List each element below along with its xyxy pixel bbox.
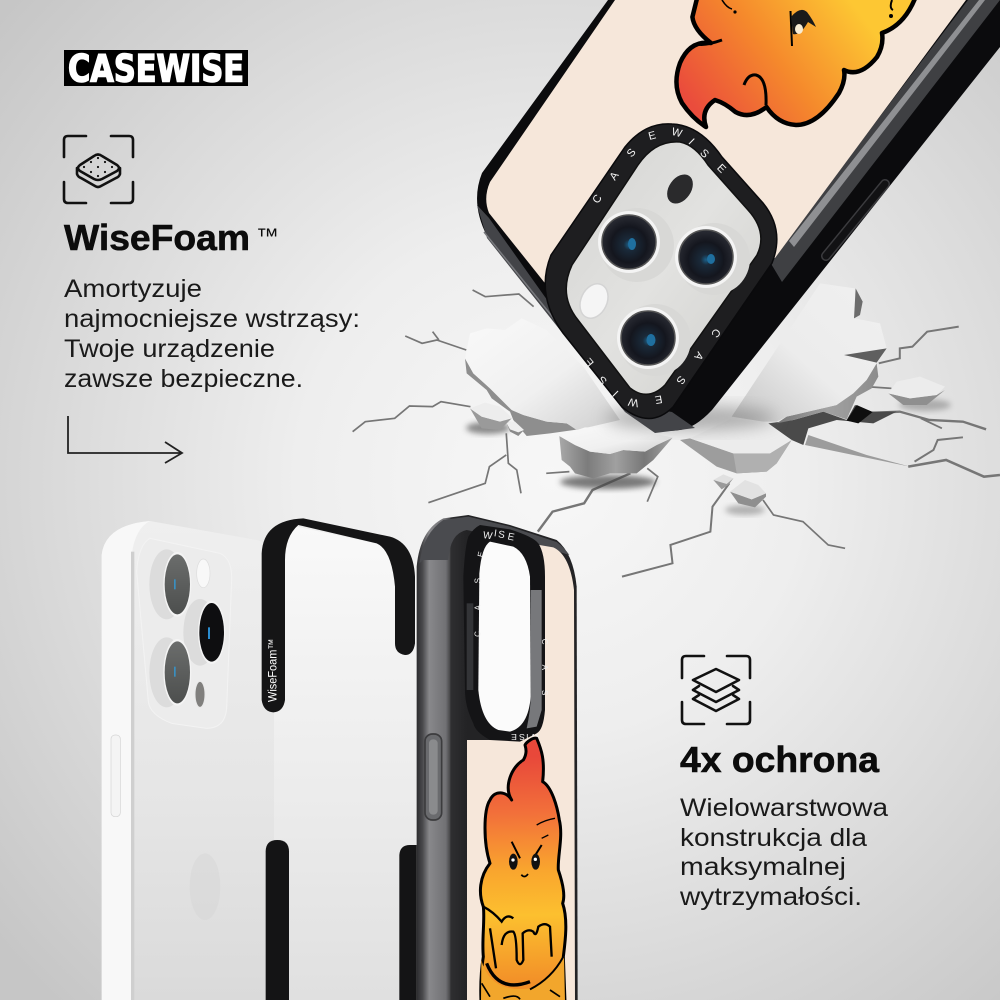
ring letters: A bbox=[474, 604, 483, 610]
text: protection description: maksymalnej bbox=[680, 853, 846, 881]
ring letters: W bbox=[482, 530, 494, 542]
text: protection description bbox=[679, 794, 888, 911]
plate: upper right bbox=[732, 283, 887, 423]
WiseFoam black strip bbox=[262, 518, 415, 712]
crack: wedge bbox=[805, 435, 910, 467]
heading: 4x ochrona: 4x ochrona bbox=[680, 739, 880, 780]
ring letters: A bbox=[540, 665, 549, 671]
impact shadows bbox=[466, 399, 951, 515]
text: protection description: wytrzymałości. bbox=[679, 883, 862, 911]
flash bbox=[197, 559, 210, 588]
sensor bbox=[195, 681, 205, 707]
text: WiseFoam description: Twoje urządzenie bbox=[64, 335, 275, 363]
white phone bbox=[102, 521, 277, 1000]
side button bbox=[826, 184, 885, 256]
flame folds bbox=[537, 818, 555, 838]
ring letters: E bbox=[476, 551, 486, 558]
ring letters: E bbox=[511, 732, 517, 742]
ring letters: S bbox=[519, 732, 525, 742]
text: WiseFoam description: najmocniejsze wstrząsy: bbox=[64, 305, 360, 333]
strip label: WiseFoam™ bbox=[265, 639, 279, 702]
camera ring bbox=[545, 124, 777, 418]
bottom flame illustration bbox=[480, 738, 566, 1000]
case phone bbox=[417, 515, 578, 1000]
lens housings bbox=[600, 208, 750, 376]
ring letters bbox=[474, 528, 549, 742]
ring text: S bbox=[596, 373, 610, 387]
heading: WiseFoam: WiseFoam bbox=[64, 217, 250, 258]
lens bottom bbox=[149, 637, 191, 707]
ring letters: S bbox=[497, 529, 506, 541]
rock: left small bbox=[507, 422, 524, 436]
flame illustration bbox=[676, 0, 916, 127]
phone body bbox=[102, 521, 277, 1000]
beige back panel bbox=[486, 0, 966, 292]
crack: dark hole bbox=[768, 405, 897, 445]
rock: right bbox=[888, 377, 945, 405]
ring text: S bbox=[697, 147, 711, 161]
camera bump bbox=[137, 538, 232, 728]
flame cone band bbox=[481, 957, 565, 1000]
text: WiseFoam description bbox=[64, 275, 360, 393]
case body bbox=[417, 515, 578, 1000]
camera ring cut-out bbox=[463, 525, 549, 742]
lens 3 bbox=[617, 307, 679, 369]
ring text bbox=[583, 126, 728, 409]
lens top bbox=[149, 549, 191, 619]
ring text: E bbox=[647, 129, 657, 143]
right cracked plates bbox=[680, 283, 945, 507]
icon: foam pad bbox=[64, 136, 133, 203]
plate: upper left bbox=[465, 318, 620, 436]
rock: left large bbox=[470, 403, 512, 430]
ring letters: E bbox=[506, 531, 516, 544]
side button bbox=[111, 735, 120, 817]
ring text: S bbox=[625, 146, 639, 160]
case translucent lower left rim bbox=[477, 205, 695, 433]
lens 1 bbox=[598, 211, 660, 273]
ring letters: C bbox=[474, 631, 483, 637]
ring text: W bbox=[627, 395, 640, 409]
rock: below large bbox=[730, 480, 766, 507]
ring letters: S bbox=[474, 578, 483, 583]
plate: lower centre left bbox=[559, 427, 673, 478]
foam layer bbox=[262, 518, 417, 1000]
ring text: E bbox=[714, 162, 728, 176]
camera plateau bbox=[566, 142, 761, 394]
text: WiseFoam description: Amortyzuje bbox=[64, 275, 202, 303]
lens 2 bbox=[675, 226, 737, 288]
ring letters: I bbox=[493, 528, 497, 539]
apple logo ghost bbox=[190, 853, 220, 920]
phone contact shadow bbox=[605, 406, 775, 430]
ring letters: I bbox=[526, 732, 529, 742]
logo: CASEWISE bbox=[68, 48, 244, 90]
flame face bbox=[509, 842, 542, 877]
flame curl bbox=[744, 75, 766, 105]
beige panel bbox=[467, 540, 575, 1000]
icon: layers bbox=[682, 656, 750, 724]
ring text: I bbox=[686, 137, 696, 147]
case body bbox=[477, 0, 1000, 431]
ring text: S bbox=[673, 373, 687, 386]
foam white panel bbox=[274, 527, 416, 1000]
ring text: C bbox=[708, 326, 723, 339]
ring text: E bbox=[654, 392, 663, 406]
text: protection description: Wielowarstwowa bbox=[680, 794, 888, 822]
ring letters: S bbox=[540, 690, 549, 695]
ring text: E bbox=[583, 355, 597, 369]
white sensor bbox=[575, 279, 613, 323]
text: protection description: konstrukcja dla bbox=[680, 824, 867, 852]
ring text: A bbox=[608, 169, 622, 183]
flame eye bbox=[722, 0, 893, 46]
ring text: W bbox=[670, 126, 684, 140]
flash dot bbox=[662, 170, 698, 208]
ring text: I bbox=[611, 388, 621, 398]
flame body bbox=[480, 738, 566, 1000]
phone side band bbox=[102, 521, 150, 1000]
case translucent side band bbox=[770, 0, 1000, 282]
flame drips bbox=[483, 907, 552, 968]
text: WiseFoam description: zawsze bezpieczne. bbox=[64, 365, 303, 393]
button bbox=[425, 734, 442, 820]
left cracked plates bbox=[465, 318, 673, 478]
top phone case bbox=[477, 0, 1000, 433]
rock: below small bbox=[713, 474, 733, 489]
lens right bbox=[183, 599, 225, 666]
ring letters: W bbox=[530, 732, 539, 742]
arrow bbox=[68, 416, 182, 463]
foam bottom bar right bbox=[399, 845, 417, 1000]
cracks bbox=[353, 290, 1000, 577]
ring letters: C bbox=[540, 639, 549, 645]
plate: lower centre right bbox=[680, 419, 792, 473]
heading: WiseFoam: ™ bbox=[256, 225, 279, 248]
case top chamfer bbox=[419, 517, 569, 563]
ring text: C bbox=[590, 193, 605, 206]
foam bottom bar left bbox=[266, 840, 289, 1000]
ring text: A bbox=[691, 349, 705, 363]
